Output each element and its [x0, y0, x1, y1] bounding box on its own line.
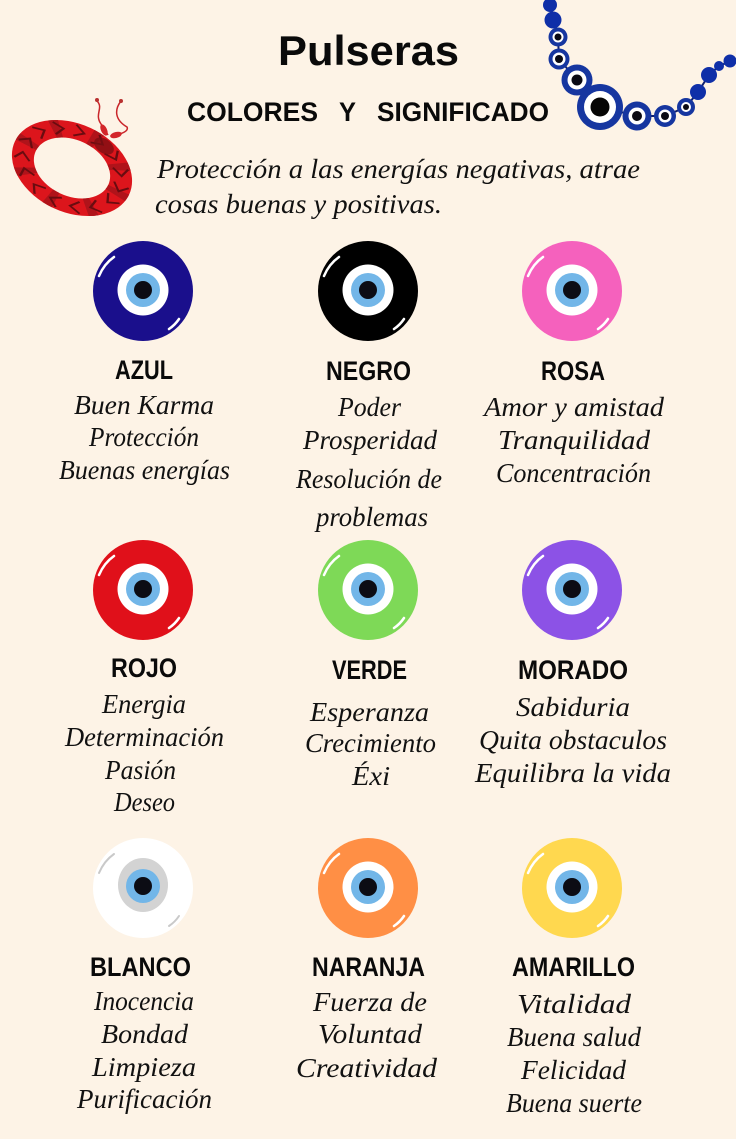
meanings: azul [59, 390, 230, 485]
label: blanco: BLANCO [90, 952, 191, 982]
meanings: naranja: Creatividad [296, 1053, 438, 1083]
subtitle [187, 97, 549, 127]
meanings: amarillo: Felicidad [520, 1055, 627, 1085]
meanings: verde: Crecimiento [305, 728, 436, 758]
meanings: rojo: Determinación [64, 722, 224, 752]
panel: rojo [64, 540, 224, 817]
meanings: naranja: Fuerza de [312, 987, 427, 1017]
meanings: negro: problemas [314, 502, 428, 532]
meanings: amarillo [506, 989, 642, 1118]
meanings: negro: Resolución de [295, 464, 442, 494]
meanings: verde: Esperanza [309, 697, 429, 727]
label: amarillo: AMARILLO [512, 952, 635, 982]
intro text [155, 154, 640, 219]
title: Pulseras [278, 27, 459, 74]
panel: morado [474, 540, 671, 788]
icon: pink eye [522, 241, 622, 341]
meanings: blanco: Bondad [101, 1019, 189, 1049]
meanings: amarillo: Buena salud [507, 1022, 641, 1052]
icon: blue evil-eye necklace [543, 0, 736, 130]
icon: orange eye [318, 838, 418, 938]
meanings: blanco: Limpieza [91, 1052, 196, 1082]
icon: white eye [93, 838, 193, 938]
meanings: amarillo: Buena suerte [506, 1088, 642, 1118]
panel: naranja [296, 838, 438, 1083]
panel: rosa [482, 241, 665, 488]
meanings: rojo [64, 689, 224, 817]
meanings: rosa: Amor y amistad [482, 392, 665, 422]
icon: red bracelet [0, 98, 144, 232]
subtitle: SIGNIFICADO [377, 97, 549, 127]
meanings: rosa: Concentración [496, 458, 651, 488]
label: morado: MORADO [518, 655, 628, 685]
label: negro: NEGRO [326, 356, 411, 386]
meanings: morado [474, 692, 671, 788]
icon: blue eye [93, 241, 193, 341]
meanings: naranja: Voluntad [318, 1019, 423, 1049]
meanings: azul: Buen Karma [74, 390, 214, 420]
meanings: rosa [482, 392, 665, 488]
meanings: azul: Buenas energías [59, 455, 230, 485]
meanings: rojo: Energia [101, 689, 186, 719]
meanings: verde [305, 697, 436, 791]
icon: red eye [93, 540, 193, 640]
intro text: cosas buenas y positivas. [155, 189, 442, 219]
meanings: verde: Éxi [351, 761, 390, 791]
icon: purple eye [522, 540, 622, 640]
meanings: naranja [296, 987, 438, 1083]
label: naranja: NARANJA [312, 952, 425, 982]
meanings: blanco: Inocencia [93, 986, 194, 1016]
icon: yellow eye [522, 838, 622, 938]
panel: negro [295, 241, 442, 532]
meanings: morado: Sabiduria [516, 692, 630, 722]
subtitle: Y [339, 97, 356, 127]
intro text: Protección a las energías negativas, atrae [156, 154, 640, 184]
meanings: rojo: Deseo [113, 787, 175, 817]
meanings: blanco: Purificación [76, 1084, 212, 1114]
icon: green eye [318, 540, 418, 640]
meanings: blanco [76, 986, 212, 1114]
label: azul: AZUL [115, 355, 173, 385]
meanings: rosa: Tranquilidad [498, 425, 651, 455]
meanings: amarillo: Vitalidad [517, 989, 632, 1019]
panel: amarillo [506, 838, 642, 1118]
meanings: morado: Equilibra la vida [474, 758, 671, 788]
label: verde: VERDE [332, 655, 407, 685]
label: rojo: ROJO [111, 653, 177, 683]
panel: blanco [76, 838, 212, 1114]
meanings: negro [295, 392, 442, 532]
meanings: rojo: Pasión [104, 755, 176, 785]
panel: verde [305, 540, 436, 791]
subtitle: COLORES [187, 97, 318, 127]
meanings: azul: Protección [88, 422, 199, 452]
meanings: negro: Poder [337, 392, 401, 422]
panel: azul [59, 241, 230, 485]
meanings: morado: Quita obstaculos [479, 725, 667, 755]
meanings: negro: Prosperidad [302, 425, 437, 455]
label: rosa: ROSA [541, 356, 605, 386]
icon: black eye [318, 241, 418, 341]
